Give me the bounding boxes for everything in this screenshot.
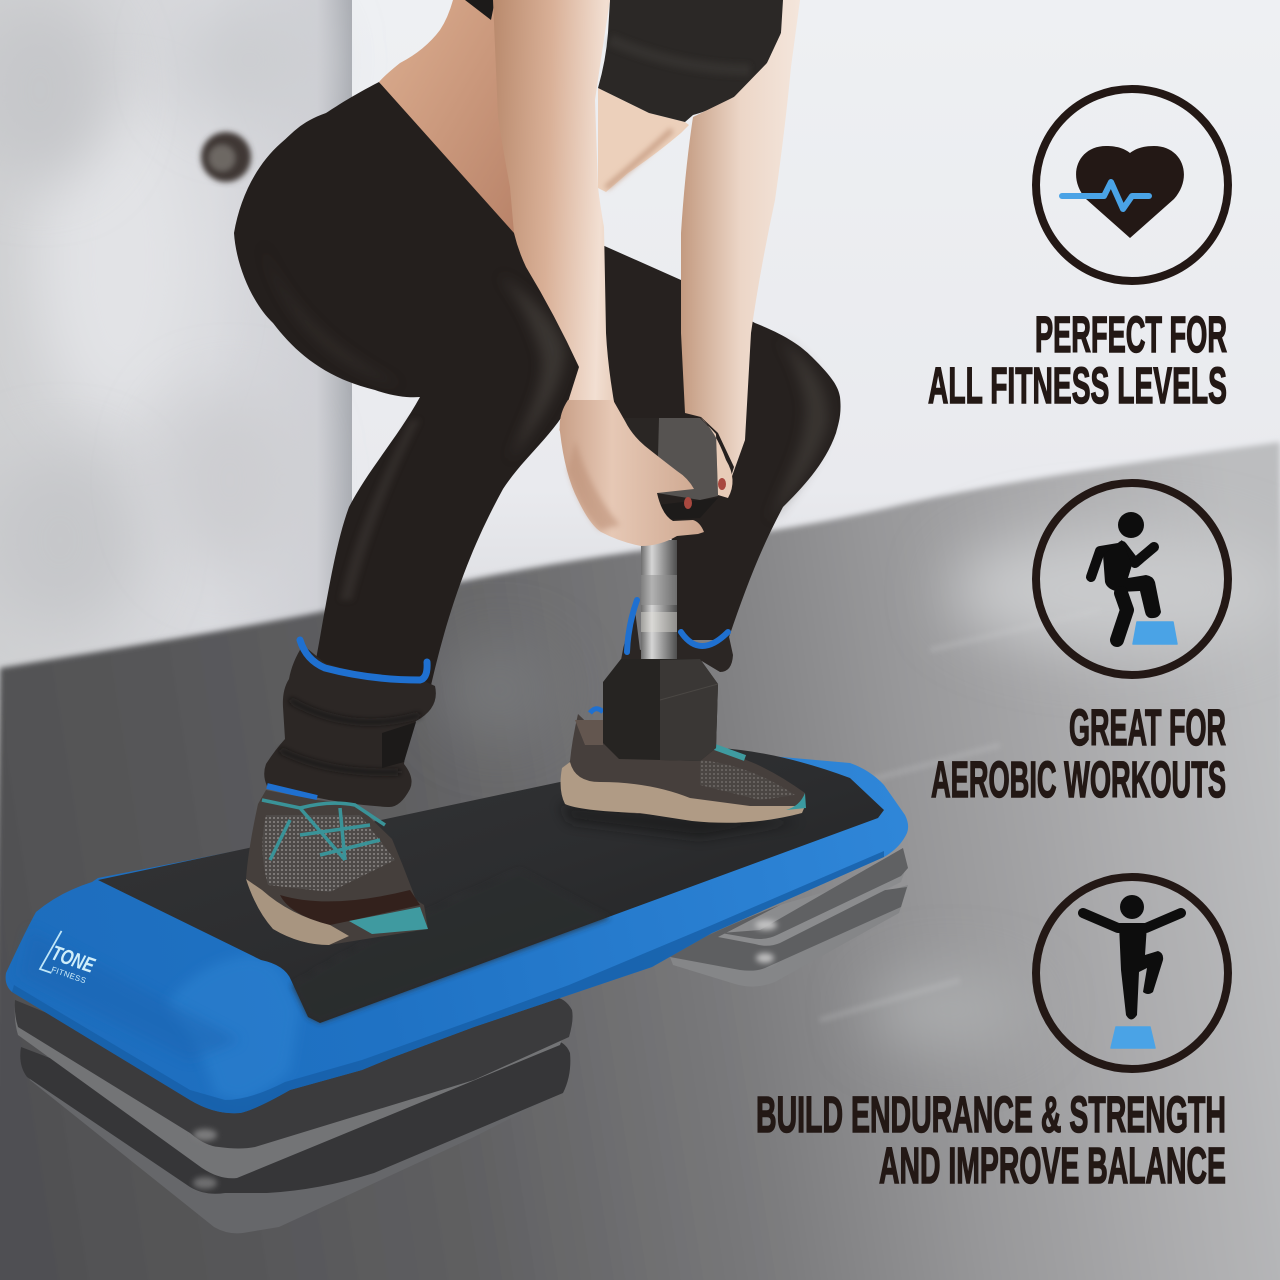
right shoe [561,709,806,823]
left shoe with laces [246,790,428,945]
wall anchor hole [201,132,251,182]
shoe shadow on step [560,805,800,838]
feature 3: balancing figure icon [1036,877,1228,1069]
right leg in black leggings [570,244,841,640]
upper hex head [619,418,659,493]
blue end cap shading [165,955,300,1102]
logo: Tone Fitness [40,928,102,986]
upper riser dark top [15,997,573,1148]
feature 3 text [756,1086,1226,1194]
left stacked risers [15,997,573,1233]
sports bra [465,0,783,122]
black textured top surface [98,748,884,1023]
left arm [493,0,625,470]
feature 1: heart icon [1036,89,1228,281]
background: concrete wall [0,0,1280,700]
lower riser light band [21,1050,570,1233]
feature 2 text [931,699,1226,808]
lower hex head [603,659,718,761]
right stacked risers [670,848,908,987]
left ankle weight [264,640,436,807]
blue platform shell [6,754,908,1113]
right ankle weight [621,600,733,672]
belly and torso skin [379,0,689,240]
feature 1 text [928,306,1227,414]
handle [641,540,677,660]
upper riser light band [15,1005,572,1178]
step platform [6,748,908,1113]
dumbbell [603,418,718,761]
background: concrete floor [0,442,1280,1280]
logo: Tone Fitness: TONE [48,942,98,978]
feature 2: stepping figure icon [1036,483,1228,675]
gripping hands [560,400,733,546]
left leg in black leggings [234,82,582,690]
right arm [681,0,800,493]
logo: Tone Fitness: FITNESS [50,965,87,985]
lower riser dark top [20,1040,570,1194]
